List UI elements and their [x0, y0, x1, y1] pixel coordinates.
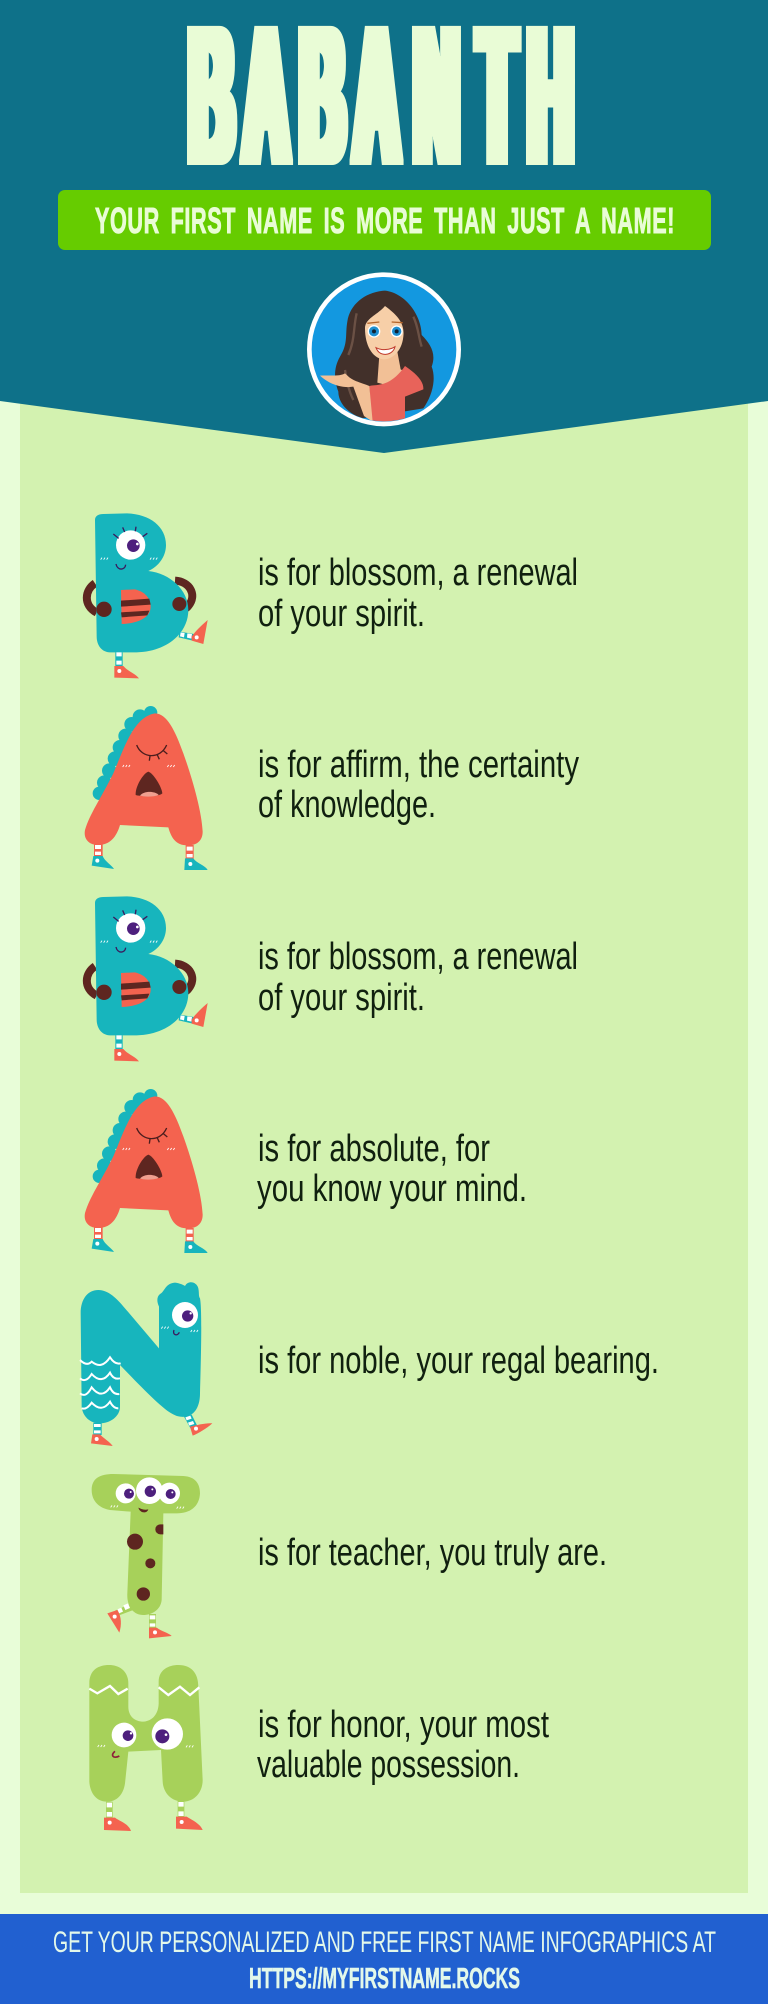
icon: letter A monster — [85, 706, 208, 870]
icon: letter N monster — [80, 1282, 212, 1446]
text: A line second: is for absolute, for — [258, 1128, 490, 1170]
text: B line: of your spirit. — [258, 593, 425, 635]
row: T — [92, 1474, 607, 1638]
header band — [0, 0, 768, 453]
icon: letter B monster second — [87, 896, 208, 1061]
text: B line second: is for blossom, a renewal — [258, 936, 578, 978]
text: A line: of knowledge. — [258, 784, 436, 826]
icon: letter H monster — [89, 1665, 203, 1831]
text: B line: is for blossom, a renewal — [258, 552, 578, 594]
row: B second — [87, 896, 578, 1061]
row: A second — [85, 1089, 527, 1253]
text: H line: is for honor, your most — [258, 1704, 549, 1746]
text: B line second — [258, 936, 578, 1019]
text: B line second: of your spirit. — [258, 977, 425, 1019]
icon: letter A monster second — [85, 1089, 208, 1253]
footer — [0, 1914, 768, 2004]
avatar: woman in circle — [309, 275, 459, 424]
footer: HTTPS://MYFIRSTNAME.ROCKS — [249, 1963, 520, 1995]
row: H — [89, 1665, 549, 1831]
text: A line second — [257, 1128, 527, 1210]
row: N — [80, 1282, 659, 1446]
text: T line: is for teacher, you truly are. — [258, 1532, 607, 1574]
icon: letter B monster — [87, 513, 208, 678]
icon: letter T monster — [92, 1474, 200, 1638]
text: B line — [258, 552, 578, 635]
row: B — [87, 513, 578, 678]
text: H line — [257, 1704, 549, 1786]
text: A line second: you know your mind. — [257, 1168, 527, 1210]
text: H line: valuable possession. — [257, 1744, 520, 1786]
text: A line — [258, 744, 579, 826]
text: N line: is for noble, your regal bearing. — [258, 1340, 659, 1382]
row: A — [85, 706, 579, 870]
panel: content background — [20, 380, 748, 1893]
banner: tagline — [58, 190, 711, 250]
text: A line: is for affirm, the certainty — [258, 744, 579, 786]
